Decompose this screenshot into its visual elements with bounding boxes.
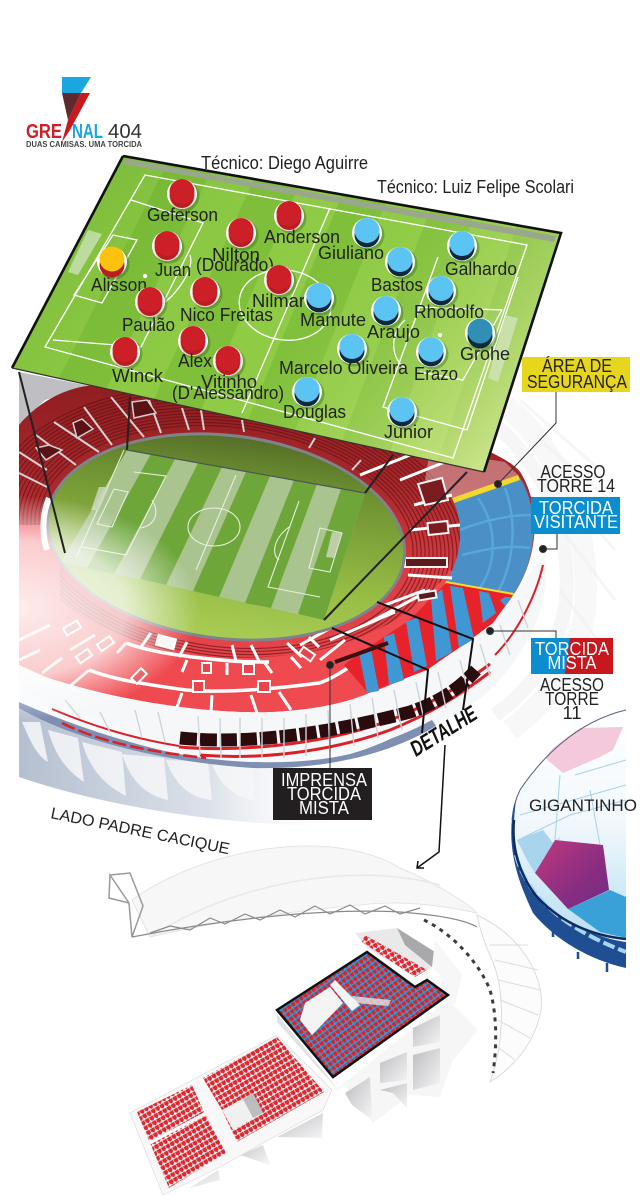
player: Juan: Juan — [155, 260, 191, 280]
grass — [48, 435, 404, 639]
visitor section blue — [446, 475, 533, 595]
goal right — [488, 315, 518, 382]
player: Bastos: Bastos — [371, 275, 423, 295]
player: Paulão — [122, 287, 175, 335]
dome top outline — [512, 710, 626, 820]
label: acesso torre 14: ACESSO — [540, 462, 606, 482]
logo: NAL — [72, 121, 103, 143]
canopy shell — [132, 846, 477, 937]
player: Galhardo: Galhardo — [445, 259, 517, 279]
player: Nilton (Dourado) — [196, 218, 274, 275]
callout: torcida mista: TORCIDA — [535, 639, 609, 659]
blue panel — [568, 890, 626, 938]
coach: Diego Aguirre: Técnico: Diego Aguirre — [201, 153, 368, 173]
faint roof at upper left — [19, 372, 90, 425]
player: Marcelo Oliveira — [279, 334, 409, 378]
player: Geferson: Geferson — [147, 205, 218, 225]
visitor section yellow bands — [452, 475, 520, 503]
player: Alex: Alex — [178, 351, 212, 371]
goal left — [68, 230, 102, 275]
label: acesso torre 11: 11 — [562, 703, 582, 723]
roof truss — [132, 905, 477, 937]
press windows band — [180, 670, 476, 740]
player: Paulão: Paulão — [122, 315, 175, 335]
callout: torcida mista — [531, 638, 613, 674]
red facade stripes — [52, 565, 543, 758]
leader: torcida mista — [486, 628, 556, 638]
lower stand red cover — [19, 525, 512, 712]
player: Erazo: Erazo — [414, 364, 458, 384]
seat row texture on upper stands — [19, 394, 460, 658]
panel outline — [12, 156, 561, 472]
magenta panel — [535, 840, 609, 909]
press leader band — [335, 643, 388, 662]
callout: área de segurança: SEGURANÇA — [527, 372, 627, 392]
callout: torcida visitante — [531, 497, 620, 534]
callout: área de segurança: ÁREA DE — [542, 356, 612, 376]
player: Giuliano: Giuliano — [318, 243, 384, 263]
body cells — [190, 1015, 440, 1188]
roof petals under facade — [22, 722, 244, 800]
label: acesso torre 11: ACESSO — [540, 675, 604, 695]
detail cross-section — [109, 846, 541, 1195]
seat block gap — [150, 1113, 206, 1143]
logo mark — [62, 77, 91, 142]
ground shadow — [19, 708, 278, 824]
white ring at left — [43, 498, 49, 550]
player: Douglas: Douglas — [283, 402, 346, 422]
callout: torcida mista: MISTA — [548, 653, 596, 673]
logo — [26, 77, 142, 149]
player: Junior — [384, 397, 433, 442]
upper chamber — [355, 928, 435, 977]
stadium — [0, 360, 615, 826]
projection lines — [19, 372, 467, 620]
stand aisles — [19, 445, 460, 713]
underside band — [19, 698, 436, 768]
player: Douglas — [283, 377, 346, 422]
dome ring band — [511, 800, 626, 968]
dome ring windows — [516, 855, 626, 952]
player: Galhardo — [445, 231, 517, 279]
player: Nilton (Dourado): Nilton — [212, 245, 260, 265]
pale pink panel — [545, 727, 623, 773]
upper vomitories — [36, 400, 156, 460]
player: Anderson: Anderson — [264, 227, 340, 247]
player: Alisson — [91, 246, 147, 295]
seating bowl — [19, 385, 535, 712]
player: Nilmar: Nilmar — [252, 291, 305, 311]
pale blue panel — [517, 830, 553, 873]
player: Mamute: Mamute — [300, 310, 366, 330]
player: Grohe: Grohe — [460, 344, 510, 364]
dome legs — [553, 930, 607, 972]
dome panel lines — [518, 760, 626, 845]
upper stand aisles — [19, 397, 361, 487]
label: acesso torre 11: TORRE — [545, 689, 599, 709]
gigantinho dome — [511, 710, 626, 972]
mixed section stripes — [344, 583, 513, 693]
callout: imprensa torcida mista: MISTA — [299, 798, 349, 818]
leader: imprensa — [326, 662, 334, 768]
detail leader lines — [332, 602, 473, 733]
facade white lip — [19, 698, 393, 762]
player: Rhodolfo — [414, 276, 484, 322]
visitor section aisles — [460, 488, 532, 592]
player: Vitinho (D'Alessandro): Vitinho — [201, 372, 257, 392]
arrow: detalhe — [417, 745, 445, 868]
player: Juan — [152, 231, 191, 280]
callout: imprensa torcida mista — [273, 768, 372, 820]
leader: torcida visitante — [540, 534, 557, 552]
player: Vitinho (D'Alessandro) — [172, 346, 284, 403]
leader: área de segurança — [494, 392, 556, 488]
panel lower edge — [12, 368, 484, 472]
vomitories — [63, 621, 315, 692]
canopy frame — [109, 873, 143, 937]
mixed seats with black outline — [277, 952, 448, 1077]
player: Giuliano — [318, 218, 384, 263]
faint roof structure on the right — [495, 400, 615, 730]
aisles in mixed seats — [300, 980, 391, 1035]
lower block opening — [222, 1093, 263, 1130]
player: Vitinho (D'Alessandro): (D'Alessandro) — [172, 383, 284, 403]
callout: imprensa torcida mista: TORCIDA — [287, 784, 361, 804]
label: gigantinho: GIGANTINHO — [529, 796, 637, 815]
player: Winck: Winck — [112, 366, 164, 386]
callout: imprensa torcida mista: IMPRENSA — [281, 770, 367, 790]
player: Erazo — [414, 337, 458, 384]
pitch lines on the field — [76, 450, 342, 597]
callout: torcida visitante: VISITANTE — [534, 512, 618, 532]
player: Alex — [178, 326, 212, 371]
logo: 404 — [108, 121, 142, 143]
player: Nico Freitas — [180, 277, 273, 325]
player: Nico Freitas: Nico Freitas — [180, 305, 273, 325]
callout: área de segurança — [522, 356, 630, 392]
pitch base — [12, 156, 561, 472]
dark truss — [424, 920, 496, 1073]
lower red seats, left block — [137, 1085, 226, 1188]
field rim — [46, 432, 406, 642]
player: Rhodolfo: Rhodolfo — [414, 302, 484, 322]
stand strip along the top edge — [123, 159, 556, 242]
logo tagline: DUAS CAMISAS. UMA TORCIDA — [26, 140, 142, 149]
logo wordmark: GRE — [26, 121, 62, 143]
player: Junior: Junior — [384, 422, 433, 442]
roof fan — [477, 915, 541, 1082]
player: Bastos — [371, 247, 423, 295]
arch column — [432, 940, 462, 1005]
pitch lines — [45, 175, 527, 458]
translucent stands beside the panel — [425, 460, 518, 498]
left fade of the bowl — [19, 498, 194, 716]
player: Grohe — [460, 318, 510, 364]
dome ring edge — [513, 820, 626, 939]
dome surface — [514, 776, 626, 938]
right vomitories — [405, 478, 449, 601]
goals on the field — [91, 487, 109, 510]
coach: Luiz Felipe Scolari: Técnico: Luiz Felipe Scolari — [377, 177, 574, 197]
slab edge below outline — [277, 1014, 338, 1090]
label: detalhe: DETALHE — [405, 700, 482, 761]
lower slab — [130, 1035, 332, 1195]
label: lado padre cacique: LADO PADRE CACIQUE — [49, 805, 231, 858]
label: acesso torre 14 — [537, 462, 615, 496]
player: Geferson — [147, 179, 218, 225]
player: Alisson: Alisson — [91, 275, 147, 295]
player: Nilton (Dourado): (Dourado) — [196, 255, 274, 275]
player: Anderson — [264, 201, 340, 247]
player: Araujo — [367, 296, 420, 342]
label: acesso torre 14: TORRE 14 — [537, 476, 615, 496]
pitch stripes — [59, 164, 561, 472]
pitch shading — [12, 156, 561, 472]
upper chamber dark wall — [397, 928, 435, 967]
right body — [333, 1000, 478, 1123]
label: acesso torre 11 — [540, 675, 604, 723]
player: Marcelo Oliveira: Marcelo Oliveira — [279, 358, 409, 378]
player: Araujo: Araujo — [367, 322, 420, 342]
facade ribs — [65, 600, 528, 758]
player: Nilmar — [252, 265, 305, 311]
upper red seats — [362, 935, 427, 977]
lower red seats, right block — [203, 1037, 324, 1142]
glass pitch — [61, 450, 365, 620]
callout: torcida visitante: TORCIDA — [539, 498, 613, 518]
tactical pitch panel — [12, 156, 561, 472]
player: Mamute — [300, 283, 366, 330]
player: Winck — [110, 337, 164, 386]
facade — [71, 556, 546, 754]
